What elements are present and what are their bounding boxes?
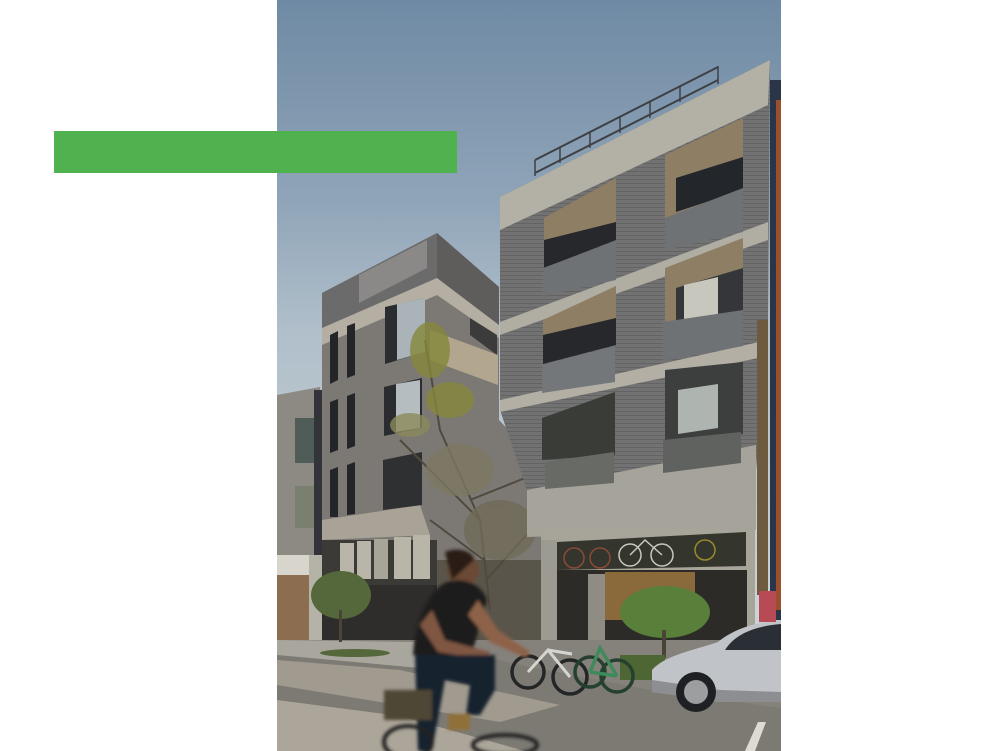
cyclist [384,550,537,751]
roof railing [535,66,718,176]
parked silver car [652,620,781,712]
shrubs [311,571,710,680]
shopfront [541,530,755,645]
right apartment building [500,60,770,646]
parked bicycles [512,648,633,694]
left apartment building [322,233,545,645]
balconies right column [665,118,743,222]
sky [277,0,781,660]
utility pole and far right edge [757,80,781,620]
tree in front of left building [390,322,545,610]
left neighbouring building [277,387,323,640]
bicycles displayed in shop window [564,540,715,568]
red street sign [759,591,776,622]
green banner [54,131,457,173]
pavement and road [277,640,781,751]
photo: street view of apartment buildings [277,0,781,751]
balconies left column [544,178,616,265]
